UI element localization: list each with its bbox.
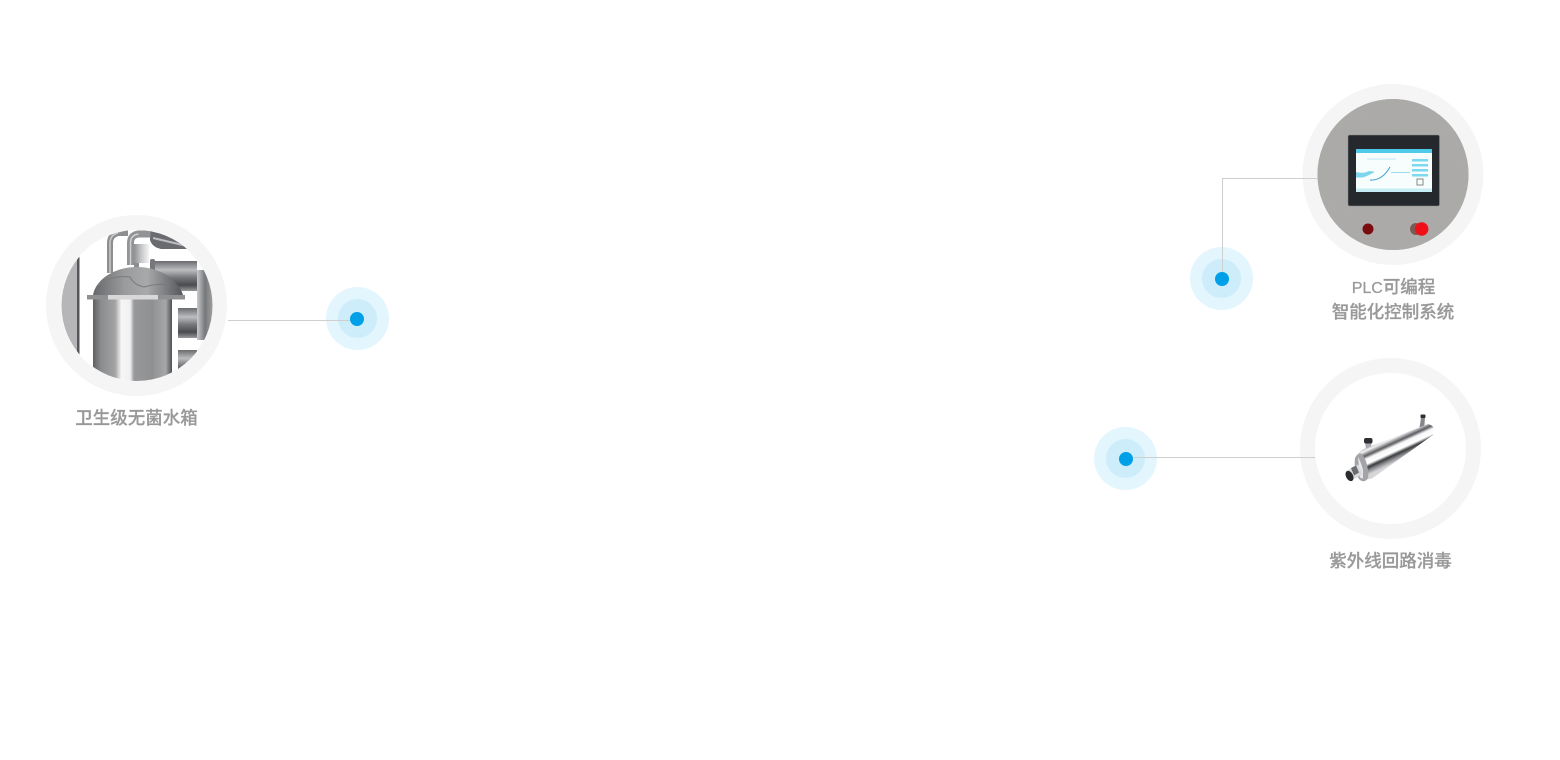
panel: UV disinfection	[1094, 366, 1474, 571]
panel surface texture	[1318, 99, 1468, 250]
label: UV: 紫外线回路消毒	[1329, 551, 1452, 571]
red button	[1410, 222, 1428, 236]
label: PLC: PLC可编程	[1352, 277, 1435, 297]
marker dot: PLC	[1190, 247, 1253, 310]
marker dot: UV	[1094, 427, 1157, 490]
label: tank: 卫生级无菌水箱	[75, 408, 198, 428]
panel: PLC control	[1190, 92, 1476, 322]
image: UV steriliser tube	[1344, 414, 1434, 482]
image: control panel	[1348, 135, 1440, 236]
label: PLC	[1332, 277, 1454, 322]
image: stainless steel tank	[60, 228, 213, 384]
connector line: tank	[228, 320, 350, 322]
connector line: UV	[1134, 456, 1315, 458]
connector line: PLC	[1222, 178, 1318, 272]
label: PLC: 智能化控制系统	[1332, 302, 1454, 322]
indicator light	[1362, 224, 1374, 234]
panel: sanitary water tank	[54, 222, 389, 428]
PLC ring	[1310, 92, 1476, 258]
UV ring	[1308, 366, 1474, 532]
marker dot: tank	[326, 287, 389, 350]
infographic canvas	[46, 84, 1484, 569]
tank ring	[54, 222, 220, 388]
